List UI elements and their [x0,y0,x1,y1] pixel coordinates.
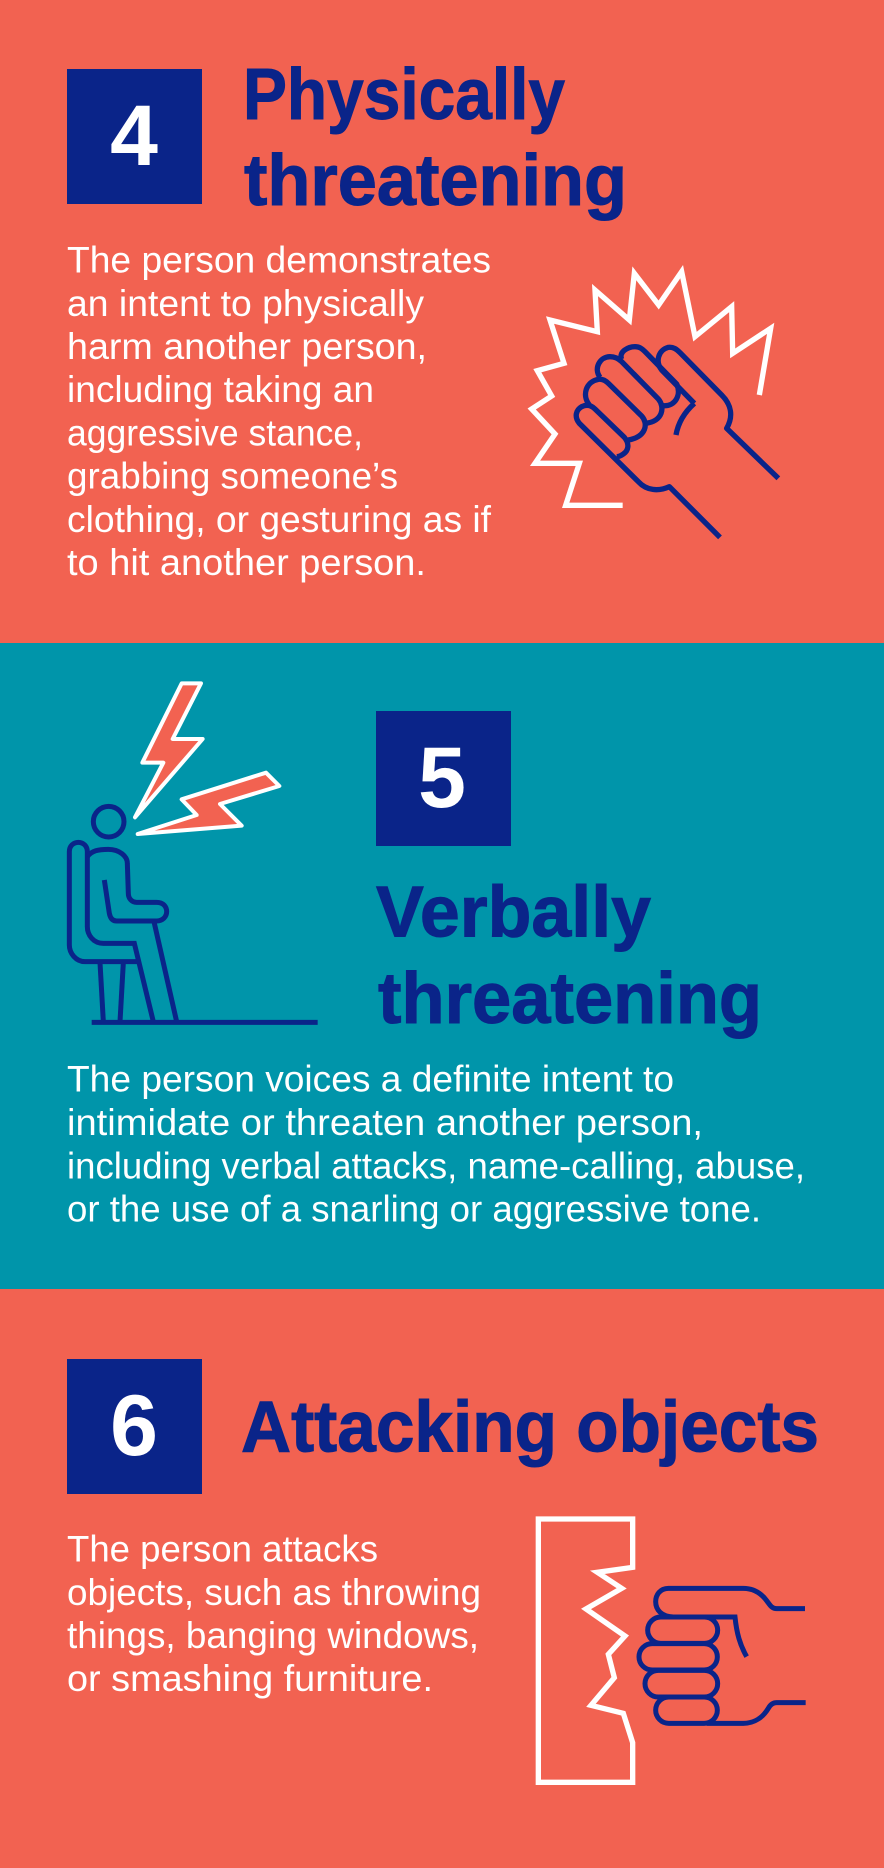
text block: verbally threatening description [67,1059,805,1230]
text block: physically threatening description: grabbing someone’s [67,456,398,497]
heading: verbally threatening [376,873,762,1039]
heading: physically threatening [243,55,627,221]
heading: verbally threatening: threatening [378,959,762,1039]
text block: physically threatening description: including taking an [67,369,374,410]
panel: verbally threatening [0,643,884,1289]
text block: physically threatening description: aggressive stance, [67,412,363,453]
text block: attacking objects description: things, banging windows, [67,1615,479,1656]
number badge 6: 6 [110,1378,158,1474]
text block: attacking objects description: objects, such as throwing [67,1572,481,1613]
text block: attacking objects description [67,1529,481,1699]
text block: verbally threatening description: including verbal attacks, name-calling, abuse, [67,1145,805,1186]
panel: physically threatening [0,0,884,643]
text block: physically threatening description: an intent to physically [67,283,424,324]
heading: verbally threatening: Verbally [376,873,651,953]
text block: attacking objects description: or smashing furniture. [67,1658,433,1699]
text block: verbally threatening description: The person voices a definite intent to [67,1059,674,1100]
text block: physically threatening description: The person demonstrates [67,240,491,281]
text block: physically threatening description: clothing, or gesturing as if [67,499,492,540]
number badge 4 [67,69,202,204]
panel: attacking objects [0,1289,884,1868]
text block: physically threatening description: harm another person, [67,326,427,367]
text block: attacking objects description: The person attacks [67,1529,378,1570]
text block: physically threatening description [67,240,492,583]
number badge 5 [376,711,511,846]
number badge 6 [67,1359,202,1494]
heading: physically threatening: Physically [243,55,565,135]
text block: physically threatening description: to hit another person. [67,542,426,583]
number badge 5: 5 [418,730,466,826]
heading: physically threatening: threatening [244,141,627,221]
icon: raised fist with burst [532,272,778,537]
number badge 4: 4 [110,88,158,184]
text block: verbally threatening description: intimidate or threaten another person, [67,1102,703,1143]
heading: attacking objects: Attacking objects [241,1388,819,1468]
icon: fist punching broken wall [538,1519,806,1782]
text block: verbally threatening description: or the use of a snarling or aggressive tone. [67,1189,761,1230]
icon: seated person with lightning bolts [69,683,318,1022]
